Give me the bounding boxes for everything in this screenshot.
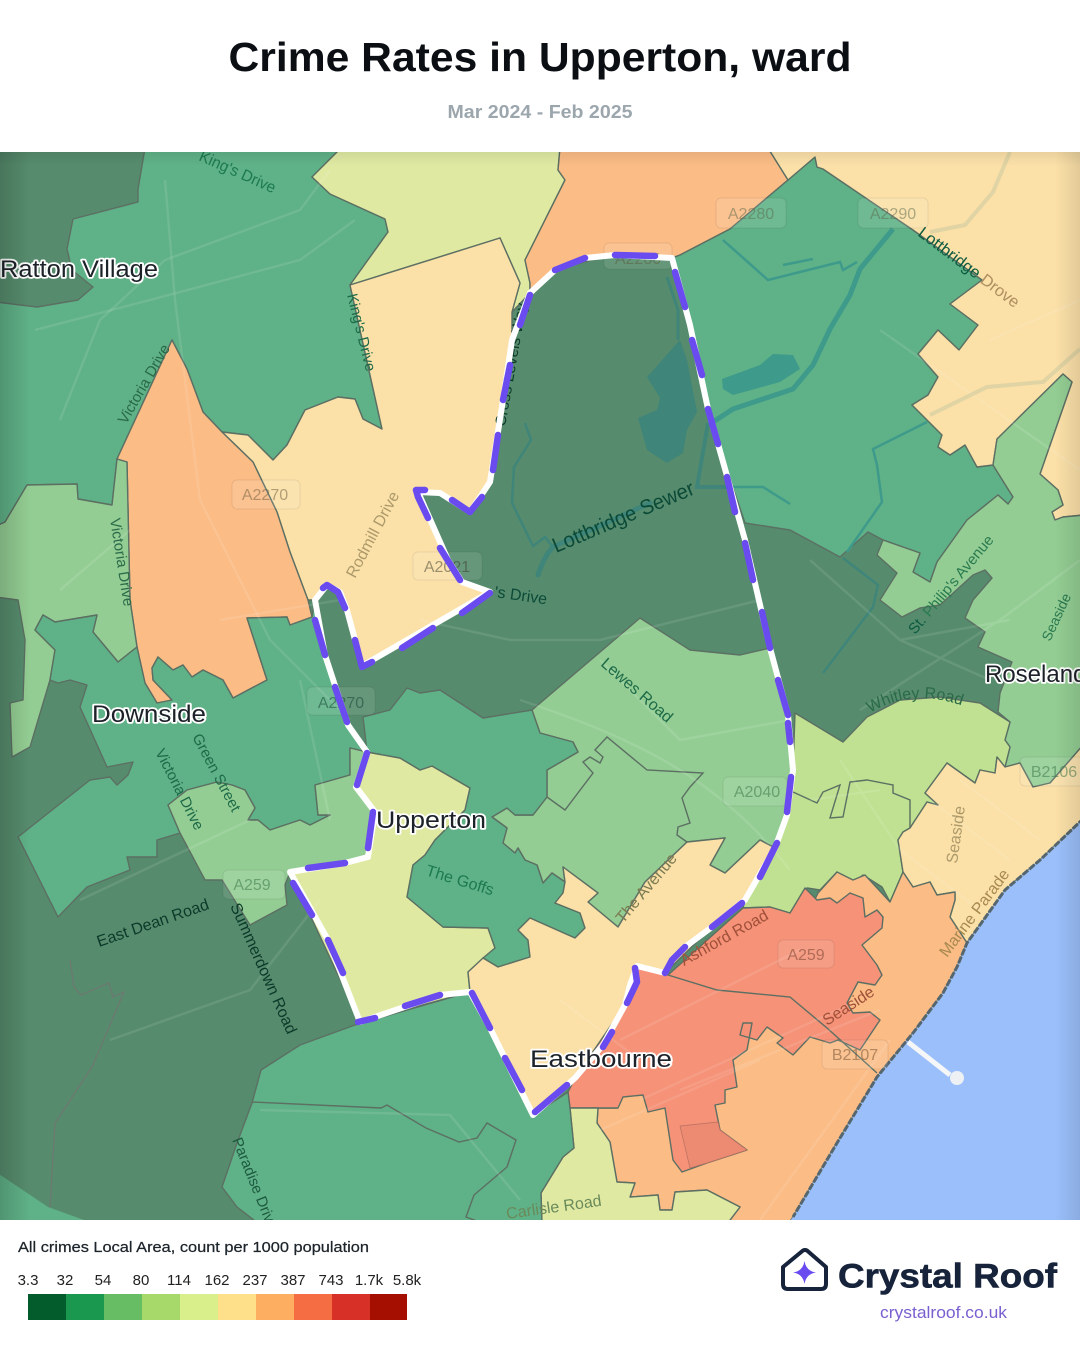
region: west orange bbox=[117, 340, 312, 703]
road shields bbox=[223, 198, 1080, 1069]
region: top orange bbox=[525, 148, 788, 293]
legend values: 54 bbox=[95, 1272, 111, 1289]
place label: Downside: Downside bbox=[92, 701, 206, 728]
label: East Dean Road: East Dean Road bbox=[95, 896, 211, 951]
legend title: All crimes Local Area, count per 1000 population bbox=[18, 1239, 369, 1256]
label: Seaside north: Seaside bbox=[1038, 590, 1074, 643]
region: central seam block bbox=[547, 737, 703, 842]
place label: Upperton: Upperton bbox=[376, 807, 486, 834]
label: Green Street: Green Street bbox=[188, 731, 244, 815]
legend bbox=[18, 1239, 422, 1320]
label: Carlisle Road: Carlisle Road bbox=[505, 1193, 603, 1223]
label: Lewes Road: Lewes Road bbox=[597, 655, 676, 726]
shield A2280 north bbox=[716, 198, 786, 228]
website url: crystalroof.co.uk bbox=[880, 1304, 1008, 1322]
label: St Philip's Avenue: St. Philip's Avenue bbox=[905, 532, 997, 638]
shield A259 east bbox=[778, 940, 834, 968]
region: south-west mid green bbox=[222, 992, 574, 1224]
shield A259 west bbox=[223, 870, 285, 899]
shield A2040 bbox=[723, 777, 787, 806]
region: south-west corner mid green bbox=[0, 1175, 84, 1220]
legend values bbox=[18, 1272, 422, 1289]
label: Whitley Road: Whitley Road bbox=[865, 687, 964, 712]
legend values: 3.3 bbox=[18, 1272, 38, 1289]
label: Summerdown Road: Summerdown Road bbox=[226, 901, 299, 1037]
south-west downs seams bbox=[50, 960, 124, 1207]
region: east light green bbox=[877, 374, 1080, 787]
shield A2290 bbox=[858, 198, 928, 228]
region: Green Street light green bbox=[168, 748, 375, 925]
legend values: 5.8k bbox=[393, 1272, 422, 1289]
shield B2107: B2107 bbox=[832, 1047, 878, 1064]
region: central and Goffs mid green bbox=[363, 688, 585, 967]
water: reservoirs and sewers bbox=[512, 229, 927, 673]
roads bbox=[35, 170, 1080, 1220]
label: The Avenue: The Avenue bbox=[613, 850, 681, 927]
region: Upperton lime bbox=[290, 752, 495, 1022]
shield A2270 west: A2270 bbox=[242, 487, 288, 504]
north-east tan roads bbox=[930, 152, 1080, 415]
shield B2107 bbox=[822, 1040, 888, 1069]
shield A259 west: A259 bbox=[233, 877, 271, 894]
subtitle: date range: Mar 2024 - Feb 2025 bbox=[448, 102, 632, 122]
map edge shading bbox=[0, 152, 1080, 1220]
label: King's Drive north: King's Drive bbox=[196, 148, 278, 197]
salmon inner seam bbox=[668, 975, 877, 1073]
region: central-north pale yellow bbox=[222, 238, 520, 666]
shield A2270 south: A2270 bbox=[318, 695, 364, 712]
region: west light green bbox=[0, 459, 137, 757]
legend values: 237 bbox=[242, 1272, 268, 1289]
ward boundary purple dashes bbox=[293, 255, 791, 1112]
label: Seaside central: Seaside bbox=[820, 984, 878, 1029]
region: north-east mid green bbox=[672, 157, 1013, 582]
shield A2280 north: A2280 bbox=[728, 206, 774, 223]
road labels bbox=[96, 152, 1070, 1272]
region: south lime bbox=[541, 1108, 740, 1224]
label: The Goffs: The Goffs bbox=[424, 863, 496, 899]
shield A2270 south bbox=[307, 687, 375, 715]
coastline bbox=[793, 818, 1080, 1217]
region: Downside mid green bbox=[18, 600, 367, 917]
label: King's Drive south: King's Drive bbox=[343, 292, 379, 373]
label: Cross Levels Way: Cross Levels Way bbox=[492, 301, 531, 428]
shield A2021: A2021 bbox=[424, 559, 470, 576]
legend values: 114 bbox=[167, 1272, 191, 1289]
icon: house with star bbox=[783, 1250, 826, 1289]
region: east lime green bbox=[743, 697, 1010, 913]
logo wordmark: Crystal Roof bbox=[838, 1258, 1058, 1296]
legend values: 1.7k bbox=[355, 1272, 384, 1289]
place label: Ratton Village: Ratton Village bbox=[0, 256, 158, 283]
region: east seafront pale yellow bbox=[898, 744, 1080, 943]
region: south-east orange bbox=[597, 872, 967, 1224]
label: Paradise Drive: Paradise Drive bbox=[228, 1135, 281, 1233]
region: north-west mid green bbox=[0, 148, 388, 526]
label: Seaside east: Seaside bbox=[944, 805, 969, 865]
shield A2021 bbox=[413, 552, 482, 580]
east seam lines bbox=[793, 780, 910, 828]
label: Lottbridge Sewer: Lottbridge Sewer bbox=[549, 477, 698, 558]
label: Lottbridge Drove: Lottbridge Drove bbox=[915, 224, 1023, 312]
region: central light green bbox=[492, 618, 793, 927]
title: Crime Rates in Upperton, ward bbox=[228, 34, 852, 80]
shield A259 east: A259 bbox=[787, 947, 825, 964]
shield A2280 top bbox=[604, 243, 672, 269]
region: town centre salmon bbox=[568, 888, 883, 1172]
label: Ashford Road: Ashford Road bbox=[678, 907, 772, 969]
pier bbox=[908, 1042, 964, 1085]
region: north-east pale yellow bbox=[768, 148, 1080, 520]
legend colour scale bbox=[28, 1294, 407, 1320]
legend values: 80 bbox=[133, 1272, 149, 1289]
label: Marine Parade: Marine Parade bbox=[937, 866, 1013, 960]
shield B2106 bbox=[1020, 757, 1080, 786]
legend values: 32 bbox=[57, 1272, 73, 1289]
label: Victoria Drive lower: Victoria Drive bbox=[151, 746, 207, 833]
label: Victoria Drive upper: Victoria Drive bbox=[115, 341, 174, 427]
shield A2270 west bbox=[232, 480, 300, 509]
label: King's Drive central: 's Drive bbox=[493, 584, 548, 608]
logo: Crystal Roof bbox=[783, 1250, 1058, 1322]
region: top lime bbox=[312, 148, 565, 312]
shield A2280 top: A2280 bbox=[615, 251, 661, 268]
legend values: 743 bbox=[318, 1272, 344, 1289]
label: Rodmill Drive: Rodmill Drive bbox=[344, 489, 403, 581]
south-west inner seam bbox=[252, 1102, 516, 1224]
place label: Eastbourne: Eastbourne bbox=[530, 1046, 672, 1073]
shield A2040: A2040 bbox=[734, 784, 780, 801]
label: Victoria Drive mid: Victoria Drive bbox=[106, 517, 137, 607]
shield B2106: B2106 bbox=[1031, 764, 1077, 781]
shield A2290: A2290 bbox=[870, 206, 916, 223]
legend values: 162 bbox=[204, 1272, 230, 1289]
legend values: 387 bbox=[280, 1272, 306, 1289]
sea bbox=[788, 818, 1080, 1224]
ward boundary white bbox=[290, 255, 793, 1115]
region: Eastbourne pale yellow bbox=[468, 838, 775, 1115]
salmon darker block bbox=[680, 1122, 747, 1168]
